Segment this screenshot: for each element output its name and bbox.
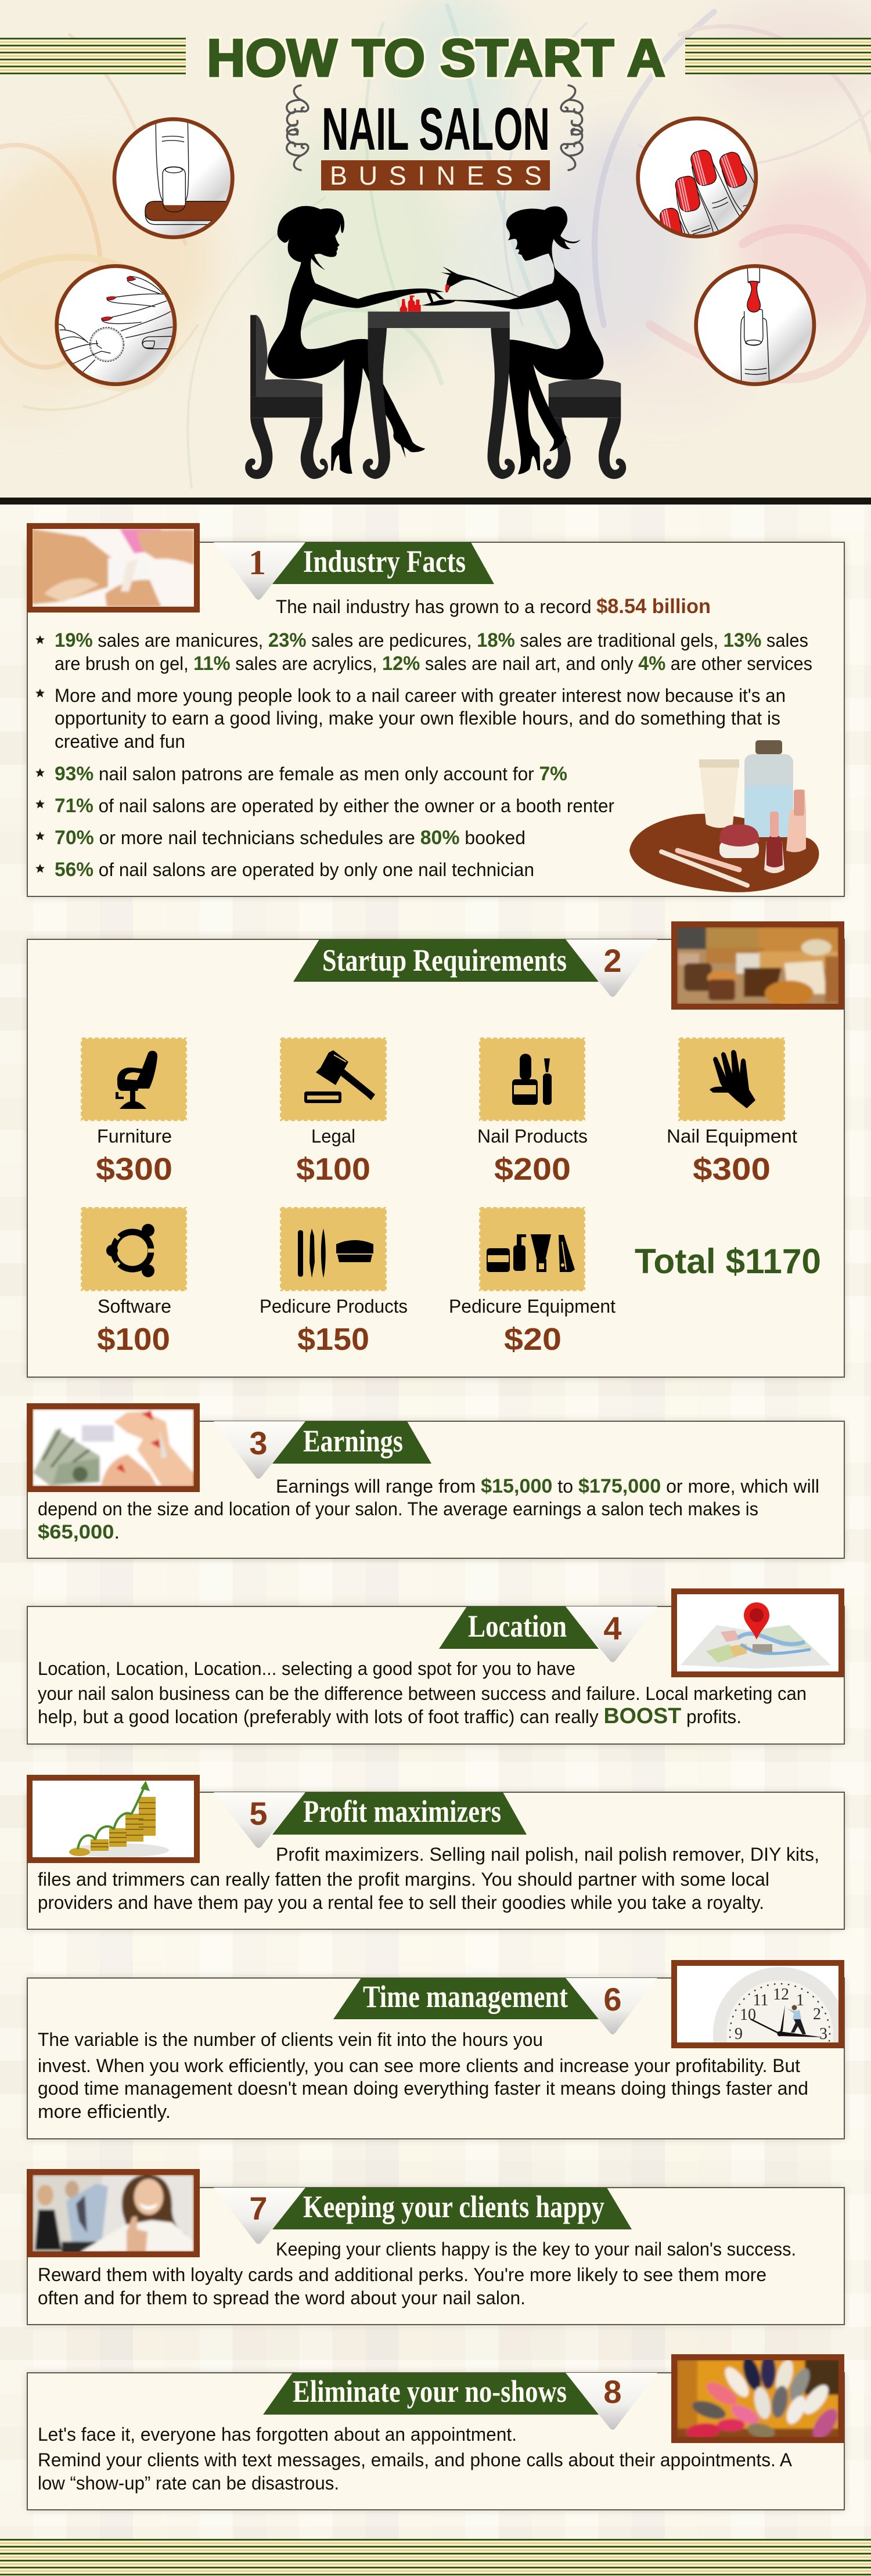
heading ribbon: keeping your clients happy: Keeping your clients happy [303, 2189, 604, 2224]
banner triangle with number 4 [566, 1606, 657, 1662]
text: location body: your nail salon business can be the difference between success and failure. Local marketing can [38, 1683, 807, 1704]
item: furniture: $300 [96, 1152, 172, 1187]
title: how to start a [0, 29, 871, 88]
text: no-shows body: low “show-up” rate can be disastrous. [38, 2473, 339, 2494]
hero header background with coloured wisps [0, 0, 871, 498]
photo: clock with man pushing hand: 2 [813, 2005, 821, 2023]
bullet list [35, 629, 812, 881]
banner triangle with number 6 [566, 1978, 657, 2034]
icon: polish bottle and brush [512, 1054, 552, 1105]
text: location body: help, but a good location (preferably with lots of foot traffic) can really BOOST profits. [38, 1704, 742, 1728]
banner triangle with number 8 [566, 2373, 657, 2430]
manicure table [363, 312, 515, 479]
right chair [543, 379, 626, 479]
left chair [245, 315, 328, 479]
panel: 8 eliminate no-shows [27, 2354, 844, 2510]
left woman silhouette [268, 206, 445, 474]
bullet list: are brush on gel, 11% sales are acrylics, 12% sales are nail art, and only 4% are other services [55, 653, 812, 675]
icon: gavel [304, 1050, 375, 1103]
icon: cotton pad hand disc [57, 266, 175, 384]
text: lead sentence: The nail industry has grown to a record $8.54 billion [276, 595, 711, 618]
heading ribbon: time management: Time management [363, 1979, 568, 2014]
panel: 7 keeping clients happy [27, 2169, 844, 2325]
logo: nail salon business: BUSINESS [330, 161, 542, 190]
item: nail products: Nail Products [477, 1126, 588, 1147]
text: no-shows body: Let's face it, everyone has forgotten about an appointment. [38, 2424, 517, 2445]
icon: nail file disc [114, 119, 232, 237]
item: pedicure equipment: Pedicure Equipment [449, 1296, 616, 1317]
photo: decorated false nails [671, 2354, 844, 2443]
text: profit body: providers and have them pay you a rental fee to sell their goodies while you take a royalty. [38, 1892, 764, 1913]
banner triangle with number 3 [214, 1421, 305, 1479]
panel: 5 profit maximizers [27, 1775, 844, 1929]
item: nail products: $200 [494, 1152, 571, 1187]
text: keeping clients body: Reward them with loyalty cards and additional perks. You're more likely to see them more [38, 2264, 766, 2285]
banner triangle with number 5: 5 [249, 1795, 268, 1832]
text: time management body [38, 2029, 808, 2122]
heading ribbon: location [439, 1606, 599, 1649]
text: no-shows body: Remind your clients with text messages, emails, and phone calls about their appointments. A [38, 2449, 793, 2470]
icon: polish brush on nail disc [696, 265, 814, 385]
text: keeping clients body: Keeping your clients happy is the key to your nail salon's success. [276, 2239, 796, 2260]
banner triangle with number 1: 1 [249, 543, 266, 582]
black divider bar under hero [0, 498, 871, 505]
photo: clock with man pushing hand: 11 [753, 1991, 768, 2009]
heading ribbon: profit maximizers: Profit maximizers [303, 1794, 501, 1829]
panel: 6 time management [27, 1960, 847, 2139]
heading ribbon: earnings [272, 1421, 431, 1464]
icon: tools and brush [298, 1228, 373, 1278]
ornament: right scroll [561, 85, 582, 170]
text: time management body: invest. When you work efficiently, you can see more clients and increase your profitability. But [38, 2055, 800, 2076]
icon: software logo [106, 1224, 160, 1277]
total cost: Total $1170 [635, 1242, 821, 1281]
banner triangle with number 8: 8 [603, 2373, 622, 2410]
text: no-shows body [38, 2424, 793, 2494]
panel: 3 earnings [27, 1403, 844, 1558]
item: nail equipment: Nail Equipment [667, 1126, 797, 1147]
banner triangle with number 4: 4 [603, 1610, 622, 1647]
item: nail equipment [667, 1037, 797, 1187]
bullet list: creative and fun [55, 731, 185, 752]
right woman silhouette [422, 206, 603, 474]
bullet list: 93% nail salon patrons are female as men only account for 7% [55, 763, 567, 785]
banner triangle with number 2: 2 [603, 942, 622, 979]
photo: money and hands [27, 1403, 200, 1492]
text: profit body: files and trimmers can really fatten the profit margins. You should partner with some local [38, 1869, 769, 1890]
text: profit body: Profit maximizers. Selling nail polish, nail polish remover, DIY kits, [276, 1844, 819, 1865]
bullet list: opportunity to earn a good living, make your own flexible hours, and do something that is [55, 708, 780, 729]
text: earnings body: Earnings will range from $15,000 to $175,000 or more, which will [276, 1475, 819, 1497]
banner triangle with number 1 [214, 542, 305, 600]
bullet list: 56% of nail salons are operated by only one nail technician [55, 859, 534, 881]
item: pedicure products [260, 1207, 408, 1357]
red polish bottles [400, 284, 449, 312]
photo: clock with man pushing hand: 10 [740, 2006, 756, 2024]
heading ribbon: eliminate your no-shows: Eliminate your no-shows [293, 2374, 567, 2409]
item: pedicure products: $150 [297, 1322, 369, 1357]
text: profit body [38, 1844, 819, 1913]
photo: clock with man pushing hand: 9 [735, 2025, 743, 2043]
panel: 4 location [27, 1588, 844, 1744]
photo: coin stacks and growth arrow [27, 1775, 200, 1863]
text: time management body: The variable is the number of clients vein fit into the hours you [38, 2029, 543, 2050]
item: pedicure products: Pedicure Products [260, 1296, 408, 1317]
photo: clock with man pushing hand: 12 [773, 1986, 789, 2004]
heading ribbon: startup requirements: Startup Requirements [322, 943, 567, 978]
text: earnings body [38, 1475, 819, 1543]
icon: jar, pump, tube, clipper [487, 1234, 575, 1272]
logo: nail salon business: NAIL SALON [322, 96, 550, 163]
text: location body [38, 1658, 807, 1728]
icon: hand [710, 1050, 755, 1108]
banner triangle with number 2 [566, 939, 657, 997]
item: nail products [477, 1037, 588, 1187]
photo: smiling woman thumbs up [27, 2169, 200, 2257]
item: pedicure equipment: $20 [504, 1322, 562, 1357]
illustration: two women at a manicure table [245, 206, 626, 479]
heading ribbon: profit maximizers [272, 1792, 527, 1835]
panel: 2 startup requirements [27, 921, 844, 1377]
text: earnings body: $65,000 . [38, 1521, 120, 1543]
item: legal: $100 [296, 1152, 370, 1187]
heading ribbon: location: Location [468, 1609, 567, 1644]
banner triangle with number 6: 6 [603, 1981, 622, 2017]
item: software: $100 [97, 1322, 170, 1357]
item: legal: Legal [311, 1126, 355, 1147]
bullet list: 19% sales are manicures, 23% sales are pedicures, 18% sales are traditional gels, 13% sales [55, 629, 808, 651]
photo: clock with man pushing hand [671, 1960, 844, 2048]
text: earnings body: depend on the size and location of your salon. The average earnings a salon tech makes is [38, 1498, 758, 1519]
item: legal [280, 1037, 387, 1187]
photo: pedicure [27, 523, 200, 613]
photo: clock with man pushing hand: 1 [796, 1991, 804, 2009]
text: time management body: good time management doesn't mean doing everything faster it means doing things faster and [38, 2078, 808, 2099]
icon: red painted nails disc [638, 118, 756, 245]
item: furniture: Furniture [97, 1126, 172, 1147]
banner triangle with number 7 [214, 2188, 305, 2244]
illustration: nail cosmetics on brown tray [629, 740, 819, 892]
photo: salon interior [671, 921, 844, 1010]
item: furniture [81, 1037, 187, 1187]
text: keeping clients body [38, 2239, 796, 2308]
panel: 1 industry facts [27, 523, 844, 896]
banner triangle with number 7: 7 [249, 2190, 268, 2226]
text: location body: Location, Location, Location... selecting a good spot for you to have [38, 1658, 575, 1679]
item: software: Software [98, 1296, 171, 1317]
bullet list: 70% or more nail technicians schedules are 80% booked [55, 827, 526, 849]
item: pedicure equipment [449, 1207, 616, 1357]
item: nail equipment: $300 [693, 1152, 771, 1187]
title: how to start a: HOW TO START A [207, 29, 665, 88]
heading ribbon: earnings: Earnings [303, 1424, 403, 1458]
photo: map with red pin [671, 1588, 844, 1677]
text: keeping clients body: often and for them to spread the word about your nail salon. [38, 2287, 526, 2308]
icon: salon chair [116, 1051, 157, 1109]
ornament: left scroll [287, 85, 308, 170]
footer stripes [0, 2539, 871, 2576]
logo: nail salon business [287, 85, 582, 190]
bullet list: More and more young people look to a nail career with greater interest now because it's an [55, 685, 786, 706]
text: time management body: more efficiently. [38, 2101, 171, 2122]
heading ribbon: industry facts: Industry Facts [303, 544, 466, 579]
bullet list: 71% of nail salons are operated by either the owner or a booth renter [55, 795, 614, 817]
photo: clock with man pushing hand: 3 [819, 2025, 827, 2043]
banner triangle with number 3: 3 [249, 1425, 268, 1461]
item: software [81, 1207, 187, 1357]
banner triangle with number 5 [214, 1792, 305, 1848]
